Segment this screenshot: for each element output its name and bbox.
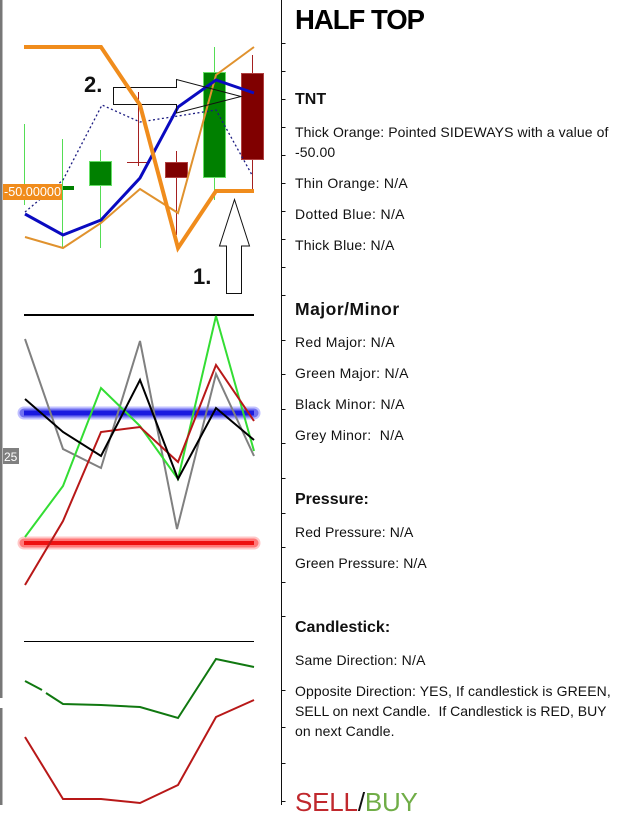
panel: Major/Minor chart — [3, 315, 254, 585]
arrow 2 — [114, 80, 241, 113]
text: thick orange: Thick Orange: Pointed SIDEWAYS with a value of — [295, 124, 609, 140]
heading: TNT: TNT — [295, 91, 326, 108]
text: dotted blue: Dotted Blue: N/A — [295, 206, 405, 222]
heading: Candlestick: Candlestick: — [295, 619, 390, 636]
callout 2.: 2. — [84, 72, 102, 97]
right price axis — [282, 0, 286, 805]
text: thick orange: -50.00 — [295, 144, 335, 160]
black minor line — [25, 380, 254, 479]
text: red pressure: Red Pressure: N/A — [295, 524, 413, 540]
thin orange line — [25, 47, 254, 248]
text: thin orange: Thin Orange: N/A — [295, 175, 408, 191]
heading: Major/Minor: Major/Minor — [295, 299, 400, 319]
text: red major: Red Major: N/A — [295, 334, 395, 350]
heading: Pressure: Pressure: — [295, 491, 369, 508]
value label: 25 — [4, 450, 18, 464]
text: same direction: Same Direction: N/A — [295, 652, 426, 668]
arrow 1 — [220, 200, 250, 294]
sell/buy signal: SELL/BUY — [295, 787, 418, 817]
green major line — [25, 316, 254, 537]
red level — [24, 536, 254, 550]
text: green major: Green Major: N/A — [295, 365, 409, 381]
dotted blue line — [25, 105, 252, 212]
blue level — [24, 406, 254, 420]
title: HALF TOP — [295, 4, 424, 35]
thick orange line — [24, 47, 254, 248]
text: opposite direction: Opposite Direction: YES, If candlestick is GREEN, — [295, 683, 611, 699]
top line — [24, 640, 254, 642]
panel: Pressure chart — [24, 642, 254, 803]
red major line — [25, 365, 254, 585]
text: green pressure: Green Pressure: N/A — [295, 555, 427, 571]
chart panel — [0, 0, 286, 805]
top black line — [24, 314, 254, 316]
candlesticks — [24, 47, 264, 248]
thick blue line — [25, 80, 254, 235]
text: opposite direction — [295, 683, 611, 739]
red pressure line — [25, 700, 254, 803]
text: opposite direction: SELL on next Candle. If Candlestick is RED, BUY — [295, 703, 607, 719]
text: thick blue: Thick Blue: N/A — [295, 237, 394, 253]
grey minor line — [25, 339, 254, 529]
text: opposite direction: on next Candle. — [295, 723, 395, 739]
green pressure line — [25, 659, 254, 718]
panel: TNT candlestick chart — [3, 47, 264, 294]
text: thick orange — [295, 124, 609, 160]
text: black minor: Black Minor: N/A — [295, 396, 405, 412]
text: grey minor: Grey Minor: N/A — [295, 427, 404, 443]
callout 1.: 1. — [193, 264, 211, 289]
value label: -50.00000 — [4, 185, 61, 199]
left chart border — [0, 0, 3, 805]
